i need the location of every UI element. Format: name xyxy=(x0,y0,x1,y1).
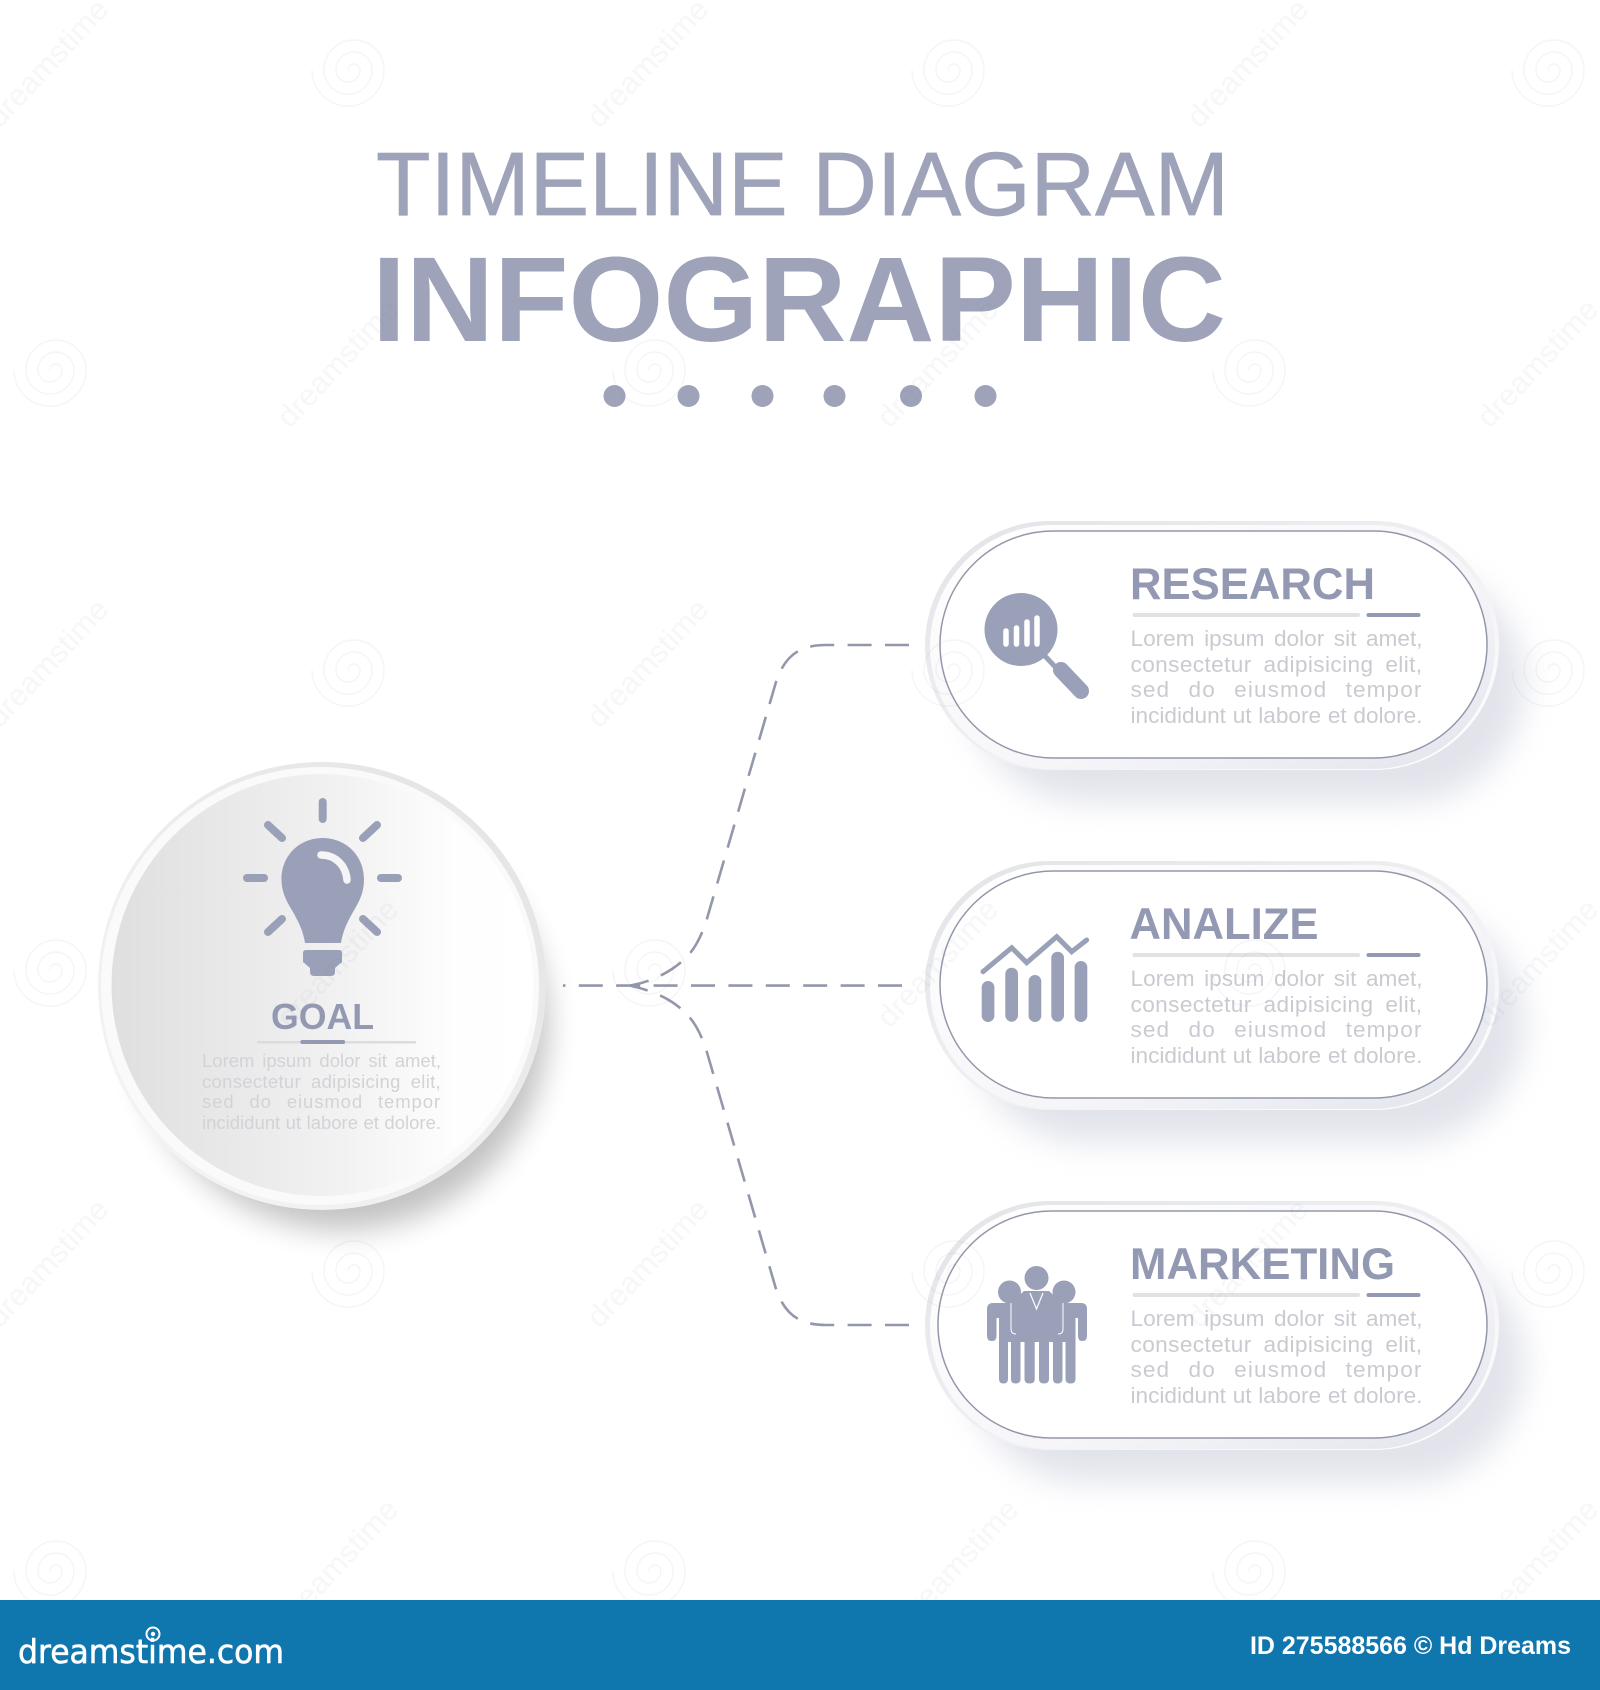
watermark text: dreamstime xyxy=(579,592,715,734)
analize text: consectetur adipisicing elit, xyxy=(1130,992,1422,1017)
marketing pill xyxy=(925,1201,1499,1450)
marketing pill shadow xyxy=(968,1246,1524,1482)
analize pill shadow xyxy=(968,906,1524,1142)
icon: light bulb xyxy=(247,802,398,976)
analize text xyxy=(1130,966,1424,1070)
panel: marketing xyxy=(925,1201,1524,1482)
marketing text: Lorem ipsum dolor sit amet, xyxy=(1130,1306,1422,1331)
panel: analize xyxy=(925,861,1524,1142)
connector: to research xyxy=(630,645,909,986)
dashed connectors xyxy=(563,645,909,1325)
title xyxy=(372,135,1229,367)
panel: goal xyxy=(98,762,548,1230)
marketing text xyxy=(1130,1306,1424,1410)
watermark text: dreamstime xyxy=(869,892,1005,1034)
connector: to analize xyxy=(563,984,902,987)
research heading: RESEARCH xyxy=(1130,560,1375,609)
analize pill xyxy=(925,861,1499,1110)
goal text xyxy=(202,1051,442,1135)
connector: to marketing xyxy=(630,986,909,1325)
footer credit: ID 275588566 © Hd Dreams xyxy=(1250,1632,1571,1660)
research text: sed do eiusmod tempor xyxy=(1130,677,1422,702)
footer logo: dreamstime.com xyxy=(18,1632,284,1671)
goal text: sed do eiusmod tempor xyxy=(202,1091,441,1112)
research pill xyxy=(925,521,1499,770)
icon: magnifier with bars xyxy=(984,593,1081,691)
watermark text: dreamstime xyxy=(579,1192,715,1334)
watermark text: dreamstime xyxy=(1179,1192,1315,1334)
icon: growth chart xyxy=(982,937,1087,1022)
research rule xyxy=(1132,613,1420,617)
icon: business team xyxy=(987,1266,1087,1384)
marketing heading: MARKETING xyxy=(1130,1240,1395,1289)
research text: consectetur adipisicing elit, xyxy=(1130,652,1422,677)
goal text: incididunt ut labore et dolore. xyxy=(202,1112,441,1133)
watermark text: dreamstime xyxy=(269,892,405,1034)
analize heading: ANALIZE xyxy=(1130,900,1318,949)
research text xyxy=(1130,626,1424,730)
footer banner xyxy=(0,1600,1600,1690)
title line: timeline diagram: TIMELINE DIAGRAM xyxy=(376,135,1229,235)
analize text: sed do eiusmod tempor xyxy=(1130,1017,1422,1042)
marketing text: sed do eiusmod tempor xyxy=(1130,1357,1422,1382)
goal disc shadow xyxy=(136,818,548,1230)
research pill shadow xyxy=(968,566,1524,802)
research text: incididunt ut labore et dolore. xyxy=(1130,703,1422,728)
goal heading: GOAL xyxy=(271,996,374,1037)
watermark text: dreamstime xyxy=(269,292,405,434)
panel: research xyxy=(925,521,1524,802)
goal disc xyxy=(98,762,546,1210)
goal rule xyxy=(257,1040,416,1044)
analize text: Lorem ipsum dolor sit amet, xyxy=(1130,966,1422,991)
watermark text: dreamstime xyxy=(869,292,1005,434)
goal text: consectetur adipisicing elit, xyxy=(202,1071,441,1092)
title dots xyxy=(604,385,996,407)
marketing text: incididunt ut labore et dolore. xyxy=(1130,1383,1422,1408)
analize text: incididunt ut labore et dolore. xyxy=(1130,1043,1422,1068)
watermark text: dreamstime xyxy=(889,1492,1025,1634)
marketing text: consectetur adipisicing elit, xyxy=(1130,1332,1422,1357)
analize rule xyxy=(1132,953,1420,957)
watermark text: dreamstime xyxy=(269,1492,405,1634)
marketing rule xyxy=(1132,1293,1420,1297)
title line: infographic: INFOGRAPHIC xyxy=(372,231,1226,367)
research text: Lorem ipsum dolor sit amet, xyxy=(1130,626,1422,651)
